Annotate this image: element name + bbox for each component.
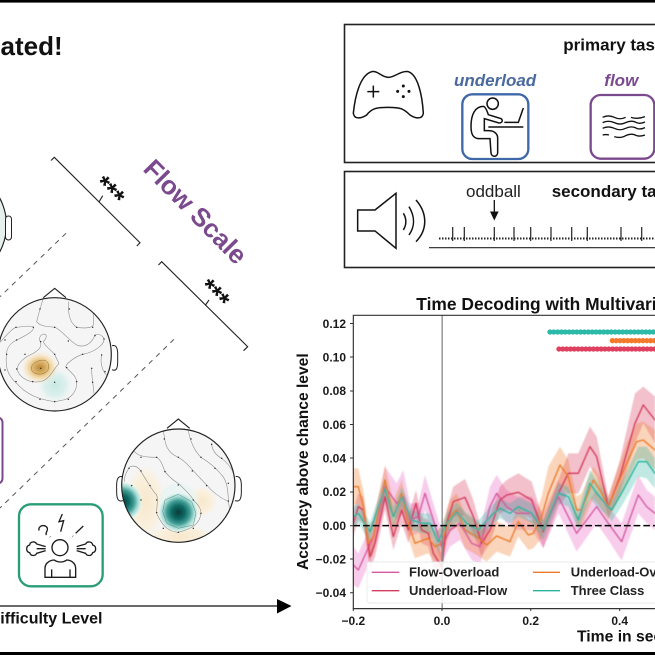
x axis tick marks and labels: 0.2: [522, 614, 539, 628]
topomap head lower right: [116, 418, 242, 543]
icon: flow waves: [591, 95, 654, 159]
line: three class: [353, 462, 655, 542]
plot area with curves: [353, 315, 655, 609]
difficulty axis arrow: [0, 599, 292, 614]
oddball arrow: [490, 200, 499, 220]
flow label: flow: [604, 71, 640, 90]
legend: [367, 562, 655, 603]
y axis tick marks and labels: 0.00: [323, 519, 346, 533]
y axis label: Accuracy above chance level: [295, 353, 312, 570]
icon: overload stressed person: [19, 504, 103, 586]
significance bracket upper: [51, 157, 140, 246]
panel: primary task: [344, 24, 655, 162]
chart: time decoding: [295, 294, 655, 646]
x axis tick marks and labels: [341, 608, 628, 628]
y axis tick marks and labels: 0.02: [323, 485, 346, 499]
significance dots: underload-flow: [559, 341, 655, 357]
significance dots: three class: [550, 324, 655, 340]
y axis tick marks and labels: 0.08: [323, 384, 346, 398]
x axis tick marks and labels: −0.2: [341, 614, 365, 628]
top border bar: [0, 0, 655, 3]
title fragment: ated!: [0, 31, 63, 61]
line: underload-flow: [353, 405, 655, 567]
x axis tick marks and labels: 0.0: [434, 614, 451, 628]
dashed separator lower: [0, 339, 174, 508]
y axis tick marks and labels: 0.04: [323, 452, 346, 466]
underload label: underload: [454, 71, 537, 90]
oddball label: oddball: [466, 182, 521, 201]
significance dots: underload-overload: [612, 333, 655, 349]
legend: Three Class: [571, 583, 644, 598]
chance level dashed line: [353, 523, 655, 528]
significance bracket lower: ***: [193, 272, 236, 316]
band: underload-flow: [353, 387, 655, 580]
stimulus timeline: [429, 227, 655, 248]
legend: Underload-Flow: [409, 583, 508, 598]
stimulus onset line: [440, 315, 444, 609]
line: flow-overload: [353, 487, 655, 570]
band: three class: [353, 447, 655, 552]
y axis tick marks and labels: 0.10: [323, 350, 346, 364]
significance bracket lower: [158, 262, 248, 351]
flow scale label: Flow Scale: [138, 153, 253, 270]
y axis tick marks and labels: 0.12: [323, 317, 346, 331]
dashed separator upper: [0, 233, 66, 297]
y axis tick marks and labels: −0.02: [316, 552, 346, 566]
y axis tick marks and labels: [316, 317, 353, 600]
icon: gamepad: [353, 72, 423, 118]
y axis tick marks and labels: 0.06: [323, 418, 346, 432]
panel: secondary task: [344, 172, 655, 268]
topomap head cropped top left: [0, 168, 12, 282]
icon: underload person at laptop: [462, 94, 528, 159]
band: underload-overload: [353, 422, 655, 562]
bottom border bar: [0, 652, 655, 655]
y axis tick marks and labels: −0.04: [316, 586, 346, 600]
topomap head middle: [0, 288, 118, 411]
line: underload-overload: [353, 440, 655, 547]
legend: Flow-Overload: [409, 565, 499, 580]
axes frame: [353, 315, 655, 609]
x axis tick marks and labels: 0.4: [611, 614, 628, 628]
significance bracket upper: ***: [88, 169, 131, 213]
icon: speaker: [358, 193, 425, 248]
purple icon box cropped left: [0, 418, 2, 484]
band: flow-overload: [353, 467, 655, 588]
